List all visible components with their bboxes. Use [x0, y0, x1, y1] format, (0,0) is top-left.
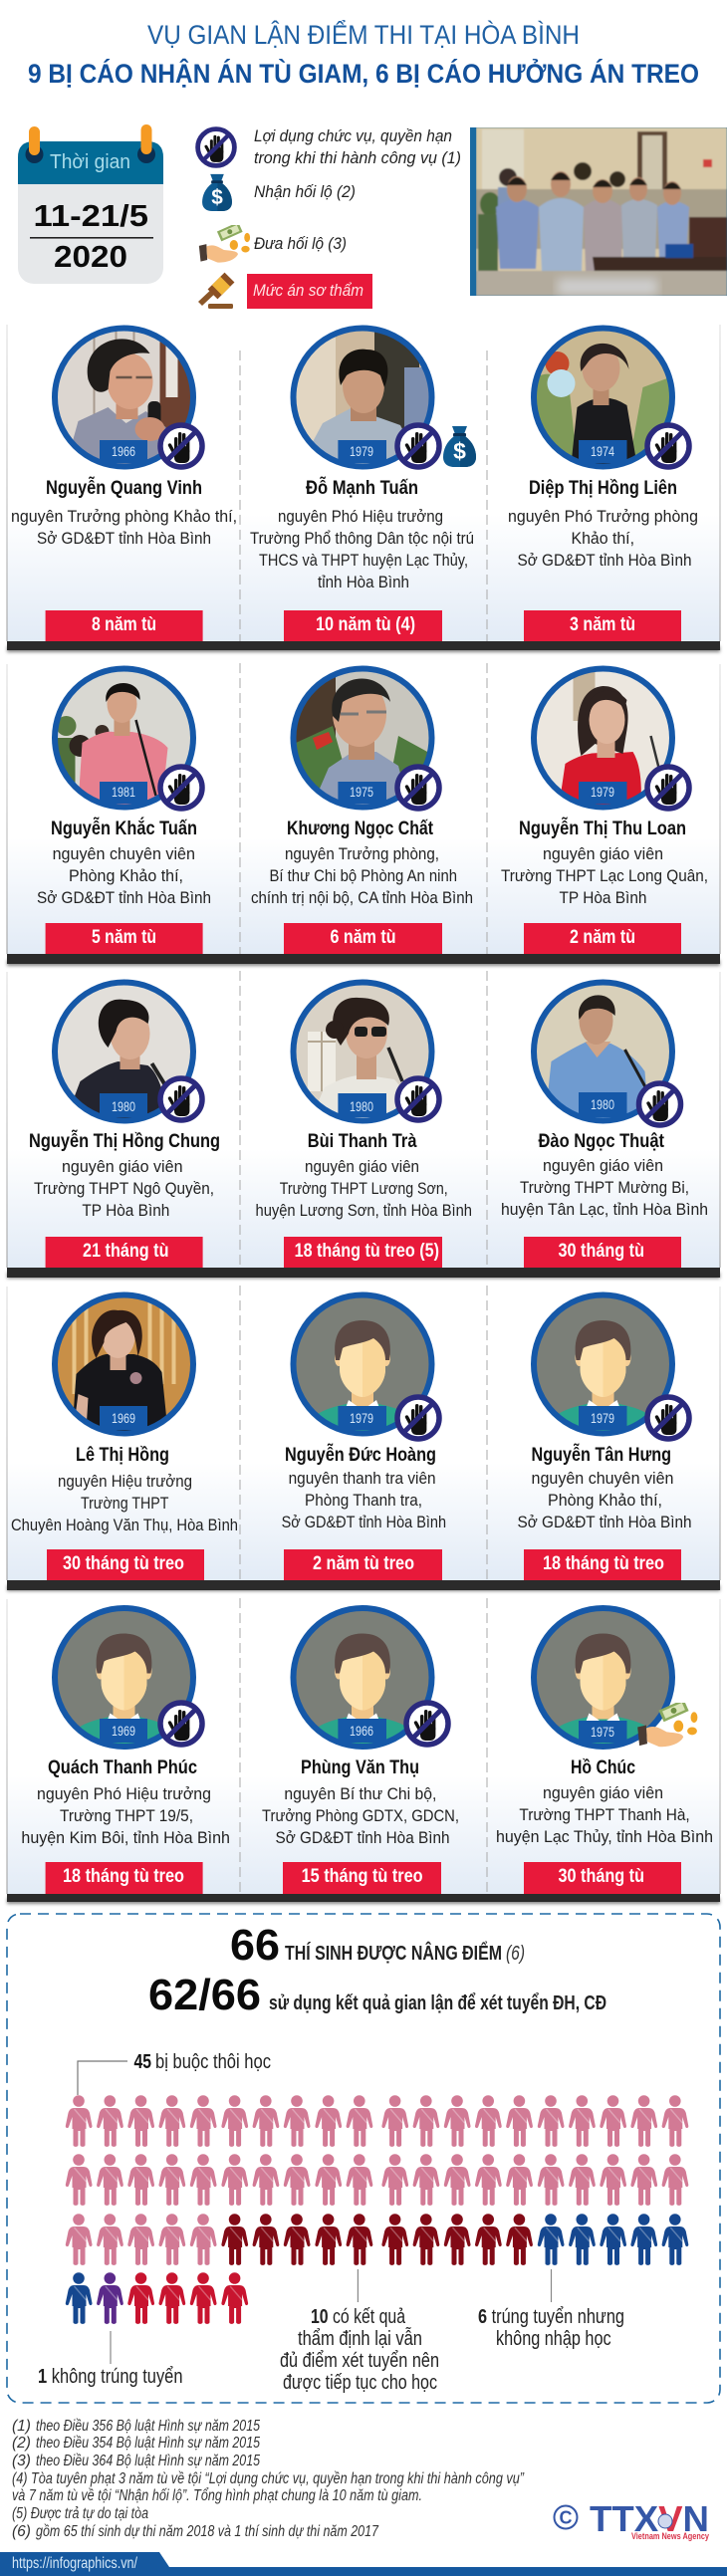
footnotes: (6): [12, 2523, 31, 2540]
calendar: time of trial: 2020: [54, 239, 127, 274]
birth year: 1966: [350, 1723, 373, 1739]
legend text: taking bribes: Nhận hối lộ (2): [254, 182, 356, 201]
birth year: 1975: [591, 1724, 614, 1740]
role: chính trị nội bộ, CA tỉnh Hòa Bình: [251, 888, 473, 907]
role: [501, 1156, 708, 1219]
icon: abuse of power: [160, 1078, 202, 1120]
icon: abuse of power: [647, 1397, 689, 1439]
portrait: placeholder avatar: [534, 1294, 672, 1434]
name: Nguyễn Tân Hưng: [532, 1444, 671, 1466]
sentence: 2 năm tù: [570, 927, 635, 948]
logo: TTXVN: TTXVN: [590, 2498, 709, 2539]
footnotes: theo Điều 364 Bộ luật Hình sự năm 2015: [36, 2453, 260, 2469]
footnotes: (1): [12, 2418, 31, 2435]
headline: 62/66: 62/66: [148, 1971, 261, 2019]
role: nguyên giáo viên: [543, 1783, 663, 1802]
sentence: 18 tháng tù treo: [543, 1553, 664, 1574]
role: [21, 1784, 230, 1847]
portrait: [293, 982, 432, 1121]
role: nguyên Phó Trưởng phòng: [508, 507, 698, 526]
portrait: [55, 669, 193, 807]
role: nguyên chuyên viên: [532, 1469, 673, 1488]
pictogram row 1: [66, 2095, 688, 2147]
portrait: [55, 329, 193, 466]
icon: abuse of power: [160, 1703, 202, 1745]
sentence: 18 tháng tù treo: [63, 1866, 184, 1887]
headline: 66 candidates: (6): [506, 1943, 525, 1965]
sentence: 6 năm tù: [331, 927, 396, 948]
footnotes: theo Điều 356 Bộ luật Hình sự năm 2015: [36, 2418, 260, 2435]
role: nguyên Phó Hiệu trưởng: [278, 507, 443, 526]
sentence: 10 năm tù (4): [316, 614, 415, 635]
portrait: placeholder avatar: [293, 1608, 432, 1747]
role: THCS và THPT huyện Lạc Thủy,: [259, 551, 468, 570]
icon: abuse of power: [160, 767, 202, 809]
role: nguyên giáo viên: [305, 1157, 419, 1176]
portrait: placeholder avatar: [293, 1294, 432, 1434]
first-instance sentence key: [247, 274, 372, 309]
card: Phùng Văn Thụ: [262, 1608, 459, 1894]
birth year: [338, 1093, 386, 1117]
birth year: [338, 782, 386, 804]
portrait: [55, 1294, 193, 1434]
birth year: 1966: [112, 443, 135, 459]
role: Trường THPT: [81, 1494, 169, 1513]
birth year: [579, 782, 627, 804]
sentence: [284, 610, 442, 641]
portrait: [534, 669, 672, 807]
headline: 66 candidates: THÍ SINH ĐƯỢC NÂNG ĐIỂM: [285, 1941, 502, 1965]
callout: 6 not enrolled: [478, 2269, 624, 2350]
role: Sở GD&ĐT tỉnh Hòa Bình: [518, 551, 691, 570]
legend text: abuse of power: [254, 126, 461, 167]
role: Phòng Khảo thí,: [548, 1491, 662, 1510]
legend text: abuse of power: trong khi thi hành công vụ (1): [254, 148, 461, 167]
birth year: 1969: [112, 1723, 135, 1739]
card: Đào Ngọc Thuật: [501, 982, 708, 1268]
birth year: [579, 1406, 627, 1430]
role: [508, 507, 698, 570]
headline: 62/66: sử dụng kết quả gian lận để xét tuyển ĐH, CĐ: [269, 1992, 606, 2014]
legend text: abuse of power: Lợi dụng chức vụ, quyền hạn: [254, 126, 452, 145]
title: [28, 19, 699, 89]
role: [282, 1469, 446, 1531]
birth year: 1979: [591, 1410, 614, 1426]
callout: 45 expelled: bị buộc thôi học: [155, 2051, 271, 2073]
role: [501, 844, 708, 907]
icon: money bag: [443, 426, 476, 467]
card: Nguyễn Đức Hoàng: [282, 1294, 446, 1580]
card: Nguyễn Tân Hưng: [518, 1294, 691, 1580]
name: Nguyễn Thị Thu Loan: [519, 818, 686, 839]
logo: TTXVN: C: [560, 2507, 572, 2527]
logo: TTXVN: Vietnam News Agency: [631, 2531, 709, 2541]
role: Trường THPT Lạc Long Quân,: [501, 866, 708, 885]
sentence: [46, 1862, 203, 1894]
birth year: 1981: [112, 784, 135, 800]
sentence: [284, 1549, 442, 1580]
name: Đỗ Mạnh Tuấn: [306, 477, 418, 499]
footnotes: (4) Tòa tuyên phạt 3 năm tù về tội “Lợi dụng chức vụ, quyền hạn trong khi thi hành công vụ”: [12, 2470, 525, 2487]
sentence: 30 tháng tù treo: [63, 1553, 184, 1574]
sentence: [284, 923, 442, 954]
role: [518, 1469, 691, 1531]
sentence: 21 tháng tù: [83, 1241, 169, 1262]
footnotes: và 7 năm tù về tội “Nhận hối lộ”. Tổng hình phạt chung là 10 năm tù giam.: [12, 2487, 422, 2504]
calendar: time of trial: Thời gian: [50, 151, 130, 173]
birth year: 1979: [350, 443, 373, 459]
headline: 66 candidates: 66: [230, 1921, 280, 1970]
footnotes: (2): [12, 2435, 31, 2452]
birth year: [100, 1406, 147, 1430]
photo: courtroom: [470, 127, 727, 296]
panel: row 5: [6, 1598, 721, 1904]
sentence: [46, 1237, 203, 1268]
panel: row 2: [6, 663, 721, 966]
legend text: giving bribes: Đưa hối lộ (3): [254, 234, 347, 253]
card: Đỗ Mạnh Tuấn: [250, 329, 476, 641]
name: Nguyễn Đức Hoàng: [285, 1444, 436, 1466]
callout: 10 continue studying: [280, 2269, 439, 2394]
role: Bí thư Chi bộ Phòng An ninh: [269, 866, 457, 885]
legend: [198, 126, 461, 309]
sentence: [46, 610, 203, 641]
name: Hồ Chúc: [571, 1757, 635, 1778]
name: Phùng Văn Thụ: [301, 1757, 419, 1778]
portrait: [55, 982, 193, 1121]
role: [255, 1157, 472, 1220]
role: Trường THPT Lương Sơn,: [280, 1179, 448, 1198]
first-instance sentence key: Mức án sơ thẩm: [253, 281, 364, 300]
icon: abuse of power: [647, 767, 689, 809]
role: Trường THPT Ngô Quyền,: [34, 1179, 214, 1198]
callout: 10 continue studying: thẩm định lại vẫn: [298, 2327, 422, 2350]
role: [37, 844, 211, 907]
role: Khảo thí,: [572, 529, 634, 548]
card: Nguyễn Thị Hồng Chung: [29, 982, 220, 1268]
role: nguyên giáo viên: [543, 844, 663, 863]
portrait: [293, 329, 432, 466]
sentence: 8 năm tù: [92, 614, 156, 635]
role: Trưởng Phòng GDTX, GDCN,: [262, 1806, 459, 1825]
portrait: placeholder avatar: [55, 1608, 193, 1747]
icon: abuse of power: [160, 425, 202, 467]
icon: abuse of power: [397, 1397, 439, 1439]
role: Phòng Khảo thí,: [69, 866, 183, 885]
role: [251, 844, 473, 907]
role: nguyên giáo viên: [543, 1156, 663, 1175]
birth year: 1975: [350, 784, 373, 800]
birth year: 1969: [112, 1410, 135, 1426]
footnotes: [12, 2418, 525, 2540]
role: Sở GD&ĐT tỉnh Hòa Bình: [37, 529, 211, 548]
role: Sở GD&ĐT tỉnh Hòa Bình: [37, 888, 211, 907]
card: Diệp Thị Hồng Liên: [508, 329, 698, 641]
role: huyện Lạc Thủy, tỉnh Hòa Bình: [496, 1827, 713, 1846]
role: huyện Lương Sơn, tỉnh Hòa Bình: [255, 1201, 472, 1220]
role: Sở GD&ĐT tỉnh Hòa Bình: [518, 1513, 691, 1531]
callout: 10 continue studying: đủ điểm xét tuyển nên: [280, 2350, 439, 2372]
role: nguyên Bí thư Chi bộ,: [284, 1784, 436, 1803]
role: nguyên chuyên viên: [53, 844, 195, 863]
sentence: 3 năm tù: [570, 614, 635, 635]
role: [34, 1157, 214, 1220]
footnotes: (5) Được trả tự do tại tòa: [12, 2505, 148, 2522]
icon: giving bribes: [199, 222, 250, 263]
sentence: [46, 923, 203, 954]
name: Nguyễn Thị Hồng Chung: [29, 1130, 220, 1152]
birth year: [579, 1092, 627, 1117]
sentence: [284, 1237, 442, 1268]
role: nguyên Trưởng phòng,: [285, 844, 439, 863]
birth year: [579, 1721, 627, 1743]
role: nguyên giáo viên: [62, 1157, 183, 1176]
role: TP Hòa Bình: [560, 888, 647, 907]
name: Bùi Thanh Trà: [308, 1131, 417, 1152]
sentence: 2 năm tù treo: [313, 1553, 414, 1574]
footer band: https://infographics.vn/: [12, 2555, 137, 2572]
birth year: [338, 440, 386, 463]
role: [496, 1783, 713, 1846]
sentence: 30 tháng tù: [558, 1241, 644, 1262]
birth year: 1974: [591, 443, 614, 459]
birth year: [579, 440, 627, 463]
sentence: [524, 1549, 681, 1580]
birth year: 1979: [591, 784, 614, 800]
card: Khương Ngọc Chất: [251, 669, 473, 954]
role: huyện Kim Bôi, tỉnh Hòa Bình: [21, 1828, 230, 1847]
footnotes: theo Điều 354 Bộ luật Hình sự năm 2015: [36, 2435, 260, 2452]
card: Nguyễn Khắc Tuấn: [37, 669, 211, 954]
role: [262, 1784, 459, 1847]
pictogram row 3: [66, 2214, 688, 2265]
portrait: placeholder avatar: [534, 1608, 672, 1747]
pictogram row 2: [66, 2154, 688, 2206]
callout: 6 not enrolled: 6 trúng tuyển nhưng: [478, 2306, 624, 2328]
callout: 10 continue studying: được tiếp tục cho học: [283, 2372, 437, 2394]
name: Quách Thanh Phúc: [48, 1757, 197, 1778]
role: huyện Tân Lạc, tỉnh Hòa Bình: [501, 1200, 708, 1219]
icon: giving bribes: [637, 1699, 697, 1747]
icon: abuse of power: [406, 1703, 448, 1745]
name: Lê Thị Hồng: [76, 1445, 169, 1466]
callout: 10 continue studying: 10 có kết quả: [311, 2306, 406, 2328]
name: Khương Ngọc Chất: [287, 819, 434, 839]
role: Chuyên Hoàng Văn Thụ, Hòa Bình: [11, 1516, 238, 1534]
name: Nguyễn Quang Vinh: [46, 477, 202, 499]
card: Nguyễn Thị Thu Loan: [501, 669, 708, 954]
name: Diệp Thị Hồng Liên: [529, 478, 677, 499]
birth year: 1980: [350, 1098, 373, 1114]
icon: abuse of power: [647, 425, 689, 467]
title: VỤ GIAN LẬN ĐIỂM THI TẠI HÒA BÌNH: [147, 19, 580, 50]
icon: abuse of power: [397, 767, 439, 809]
role: TP Hòa Bình: [82, 1201, 169, 1220]
card: Lê Thị Hồng: [11, 1294, 238, 1580]
icon: gavel: [198, 273, 234, 309]
sentence: [524, 1862, 681, 1894]
sentence: 5 năm tù: [92, 927, 156, 948]
birth year: 1979: [350, 1410, 373, 1426]
sentence: [47, 1549, 204, 1580]
icon: abuse of power: [639, 1083, 681, 1125]
panel: row 1: [6, 325, 721, 652]
role: nguyên Trưởng phòng Khảo thí,: [11, 507, 237, 526]
footer band: [0, 2552, 727, 2576]
role: Trường THPT Thanh Hà,: [519, 1805, 690, 1824]
birth year: [100, 1719, 147, 1743]
pictogram chart: 66 candidates: [66, 2095, 688, 2324]
card: Quách Thanh Phúc: [21, 1608, 230, 1894]
footnotes: (3): [12, 2453, 31, 2469]
sentence: 18 tháng tù treo (5): [295, 1241, 439, 1262]
role: Sở GD&ĐT tỉnh Hòa Bình: [275, 1828, 450, 1847]
panel: candidates statistics: [7, 1914, 720, 2403]
role: [11, 1472, 238, 1534]
panel: row 3: [6, 971, 721, 1279]
role: Sở GD&ĐT tỉnh Hòa Bình: [282, 1513, 446, 1531]
sentence: 15 tháng tù treo: [302, 1866, 423, 1887]
headline: 66 candidates: [230, 1921, 525, 1970]
role: Trường Phổ thông Dân tộc nội trú: [250, 529, 474, 548]
sentence: 30 tháng tù: [558, 1866, 644, 1887]
role: Trường THPT Mường Bi,: [520, 1178, 689, 1197]
icon: abuse of power: [397, 1078, 439, 1120]
sentence: [524, 610, 681, 641]
calendar: time of trial: 11-21/5: [34, 198, 148, 233]
birth year: [100, 782, 147, 804]
icon: money bag: [202, 174, 232, 211]
role: Phòng Thanh tra,: [305, 1491, 422, 1510]
callout: 6 not enrolled: không nhập học: [496, 2328, 611, 2350]
footnotes: gồm 65 thí sinh dự thi năm 2018 và 1 thí sinh dự thi năm 2017: [36, 2523, 379, 2540]
birth year: 1980: [112, 1098, 135, 1114]
name: Đào Ngọc Thuật: [538, 1131, 665, 1152]
headline: 62/66: [148, 1971, 606, 2019]
portrait: [534, 982, 672, 1121]
portrait: [534, 329, 672, 466]
card: Nguyễn Quang Vinh: [11, 329, 237, 641]
birth year: [338, 1719, 386, 1743]
birth year: [100, 440, 147, 463]
role: [250, 507, 474, 591]
icon: abuse of power: [198, 129, 234, 165]
role: nguyên thanh tra viên: [289, 1469, 436, 1488]
callout: 45 expelled: [78, 2051, 271, 2095]
card: Bùi Thanh Trà: [255, 982, 472, 1268]
calendar: time of trial: [18, 124, 163, 284]
callout: 45 expelled: 45: [133, 2051, 151, 2073]
sentence: [524, 923, 681, 954]
birth year: 1980: [591, 1096, 614, 1112]
sentence: [283, 1862, 441, 1894]
role: tỉnh Hòa Bình: [318, 573, 409, 591]
callout: 1 not admitted: 1 không trúng tuyển: [38, 2366, 183, 2388]
pictogram row 4: [66, 2272, 248, 2324]
name: Nguyễn Khắc Tuấn: [51, 818, 197, 839]
sentence: [524, 1237, 681, 1268]
panel: row 4: [6, 1286, 721, 1591]
icon: abuse of power: [397, 425, 439, 467]
card: Hồ Chúc: [496, 1608, 713, 1894]
role: Trường THPT 19/5,: [60, 1806, 193, 1825]
birth year: [338, 1406, 386, 1430]
role: nguyên Phó Hiệu trưởng: [37, 1784, 211, 1803]
birth year: [100, 1093, 147, 1117]
role: nguyên Hiệu trưởng: [58, 1472, 192, 1491]
role: [11, 507, 237, 548]
portrait: [293, 669, 432, 807]
